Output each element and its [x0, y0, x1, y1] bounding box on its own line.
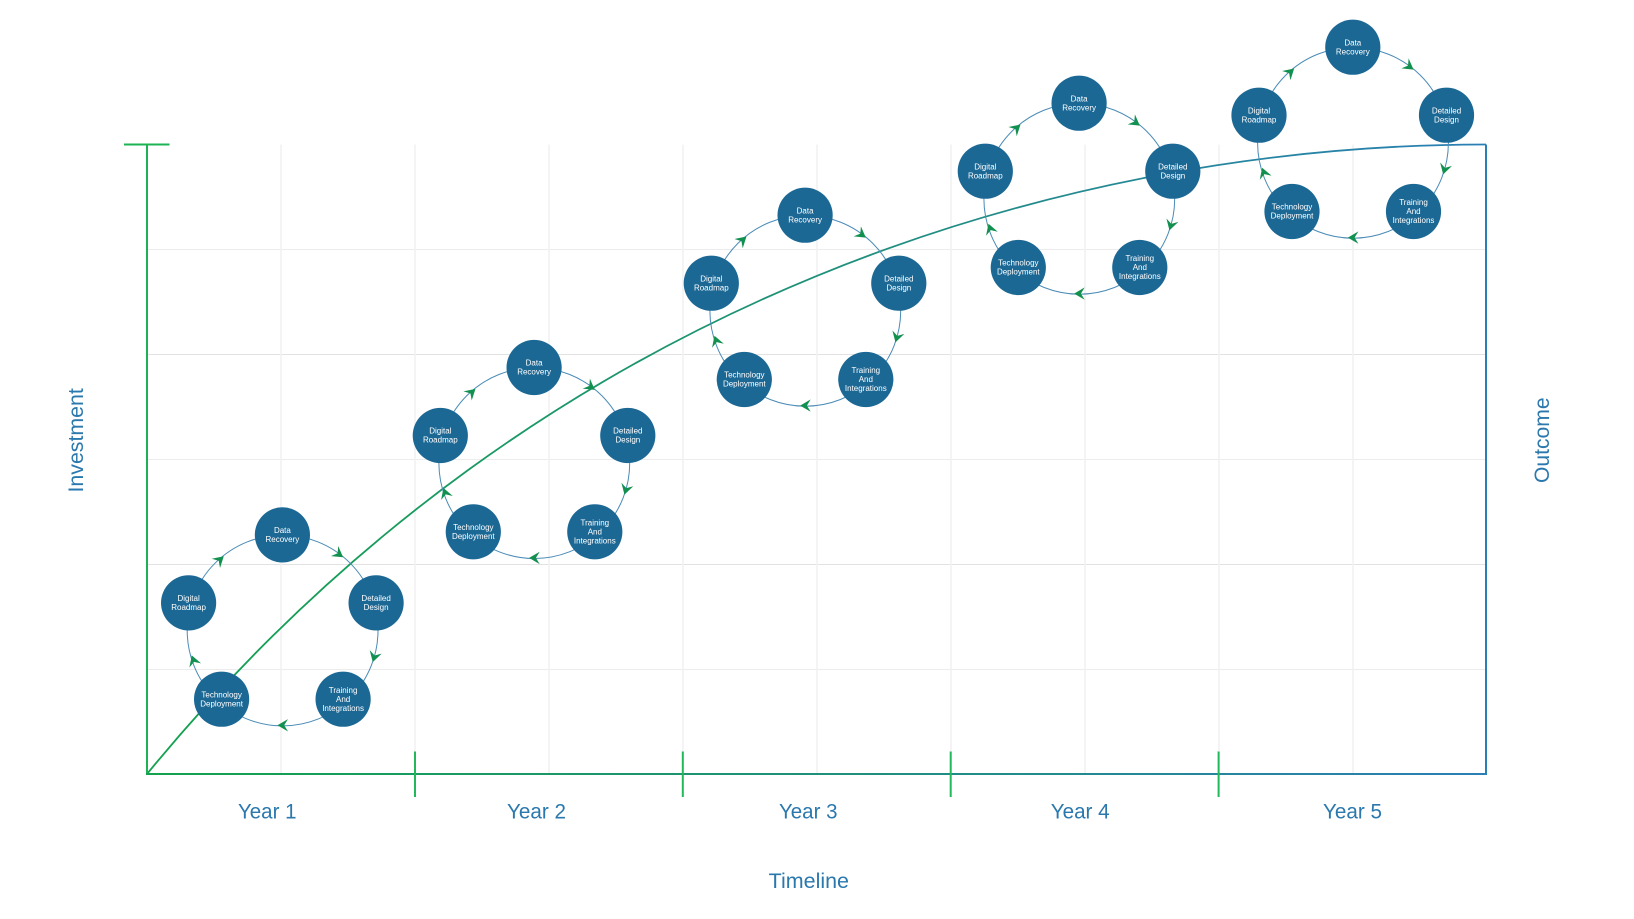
ring — [984, 103, 1175, 294]
label: year 1: Year 1 — [238, 800, 296, 824]
outcome axis — [1485, 144, 1487, 775]
node: data recovery: Recovery — [1062, 103, 1096, 112]
node: technology deployment — [991, 240, 1046, 295]
node: technology deployment: Technology — [201, 690, 242, 699]
node: digital roadmap: Roadmap — [423, 436, 458, 445]
node: training and integrations: And — [1133, 263, 1147, 272]
node: technology deployment: Deployment — [997, 268, 1040, 277]
node: detailed design: Design — [1434, 115, 1459, 124]
node: detailed design — [1145, 144, 1200, 199]
node: data recovery: Recovery — [788, 215, 822, 224]
node: training and integrations: And — [1406, 207, 1421, 216]
year ticks — [415, 752, 1219, 797]
axis title: outcome: Outcome — [1531, 397, 1554, 483]
label: year 2: Year 2 — [507, 800, 566, 824]
node: training and integrations — [316, 672, 371, 727]
node: data recovery: Recovery — [1336, 47, 1370, 56]
node: digital roadmap: Digital — [1248, 106, 1270, 115]
node: training and integrations: And — [588, 528, 602, 537]
year 3 cycle — [684, 188, 926, 412]
node: technology deployment: Technology — [724, 371, 765, 380]
node: digital roadmap: Roadmap — [171, 603, 206, 612]
node: technology deployment: Technology — [998, 259, 1039, 268]
node: data recovery — [255, 507, 310, 562]
node: detailed design: Design — [1160, 171, 1185, 180]
node: detailed design: Detailed — [361, 594, 391, 603]
node: training and integrations — [1386, 184, 1441, 239]
node: digital roadmap — [413, 408, 468, 463]
timeline axis — [146, 773, 1486, 775]
node: technology deployment — [717, 352, 772, 407]
node: digital roadmap: Digital — [974, 162, 997, 171]
year 5 cycle — [1231, 20, 1474, 244]
node: detailed design: Detailed — [1158, 162, 1187, 171]
node: detailed design: Detailed — [613, 427, 642, 436]
node: data recovery — [778, 188, 833, 243]
axes and year ticks — [124, 144, 1486, 797]
node: technology deployment — [446, 504, 501, 559]
ring — [439, 368, 630, 558]
arrowheads — [438, 379, 633, 564]
node: digital roadmap — [161, 575, 216, 630]
node: detailed design — [348, 575, 404, 630]
ring — [187, 535, 378, 726]
node: detailed design: Design — [886, 283, 911, 292]
growth curve — [147, 144, 1486, 774]
node: data recovery: Data — [1344, 38, 1362, 47]
node: training and integrations: Training — [1125, 254, 1154, 263]
node: digital roadmap: Roadmap — [1242, 115, 1277, 124]
node: training and integrations: Training — [580, 519, 609, 528]
node: data recovery: Recovery — [517, 368, 551, 377]
node: data recovery: Data — [1071, 94, 1088, 103]
node: technology deployment: Deployment — [200, 699, 244, 708]
node: digital roadmap: Roadmap — [968, 171, 1003, 180]
node: technology deployment: Deployment — [452, 532, 495, 541]
node: digital roadmap: Digital — [177, 594, 200, 603]
label: year 3: Year 3 — [779, 800, 838, 824]
label: year 4: Year 4 — [1051, 800, 1110, 824]
year 4 cycle — [958, 76, 1200, 300]
node: digital roadmap — [1231, 88, 1287, 143]
node: data recovery — [1052, 76, 1107, 131]
node: detailed design: Detailed — [884, 274, 913, 283]
node: detailed design — [600, 408, 655, 463]
node: digital roadmap: Roadmap — [694, 283, 729, 292]
node: training and integrations — [567, 504, 622, 559]
node: data recovery: Data — [274, 526, 291, 535]
node: technology deployment: Technology — [453, 523, 494, 532]
node: data recovery: Data — [797, 206, 814, 215]
arrowheads — [983, 114, 1178, 300]
node: training and integrations: Training — [1399, 198, 1428, 207]
node: training and integrations: Integrations — [322, 704, 364, 713]
investment axis — [124, 144, 170, 774]
node: detailed design: Detailed — [1432, 106, 1461, 115]
node: technology deployment: Deployment — [723, 380, 766, 389]
year 2 cycle — [413, 340, 655, 564]
year 1 cycle — [161, 507, 404, 732]
ring — [710, 215, 901, 406]
node: training and integrations: Integrations — [845, 384, 887, 393]
node: training and integrations: Integrations — [1393, 216, 1434, 225]
arrowheads — [186, 546, 382, 732]
node: detailed design — [1419, 88, 1474, 143]
node: detailed design: Design — [615, 436, 640, 445]
label: year 5: Year 5 — [1323, 800, 1382, 824]
axis title: investment: Investment — [65, 388, 88, 492]
node: technology deployment: Technology — [1272, 203, 1312, 212]
node: training and integrations: Training — [851, 366, 880, 375]
node: digital roadmap: Digital — [700, 274, 723, 283]
node: digital roadmap — [958, 144, 1013, 199]
node: training and integrations: Integrations — [574, 537, 616, 546]
node: detailed design — [871, 256, 926, 311]
node: training and integrations: And — [336, 695, 350, 704]
node: digital roadmap — [684, 256, 739, 311]
arrowheads — [709, 226, 904, 412]
node: training and integrations — [838, 352, 893, 407]
node: data recovery — [1325, 20, 1380, 75]
node: data recovery — [506, 340, 562, 395]
node: detailed design: Design — [364, 603, 389, 612]
axis title: timeline: Timeline — [769, 870, 849, 893]
arrowheads — [1256, 58, 1452, 244]
node: training and integrations: Training — [329, 686, 357, 695]
node: technology deployment: Deployment — [1271, 212, 1314, 221]
node: technology deployment — [194, 672, 249, 727]
node: data recovery: Recovery — [266, 535, 299, 544]
node: digital roadmap: Digital — [429, 427, 452, 436]
node: technology deployment — [1264, 184, 1320, 239]
ring — [1258, 47, 1448, 238]
node: training and integrations: And — [859, 375, 873, 384]
node: data recovery: Data — [526, 359, 543, 368]
node: training and integrations: Integrations — [1119, 272, 1161, 281]
node: training and integrations — [1112, 240, 1167, 295]
